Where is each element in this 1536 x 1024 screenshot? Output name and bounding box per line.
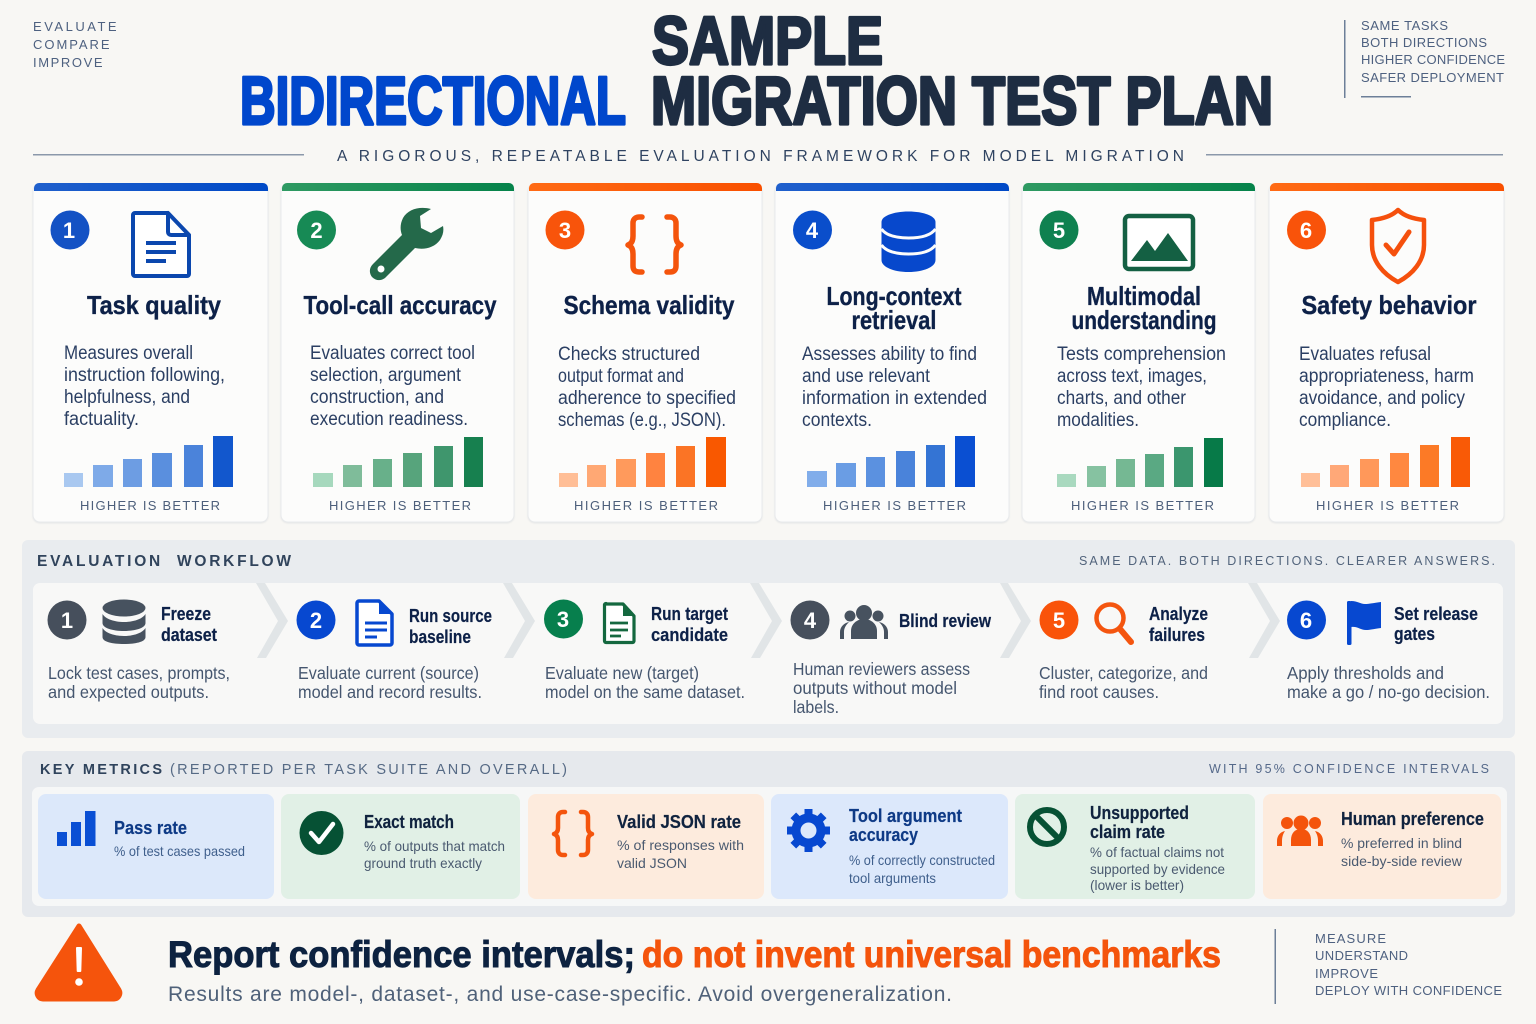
chevrons — [256, 583, 1280, 658]
step 2: model and record results. — [298, 682, 482, 702]
description: construction, and — [310, 387, 444, 408]
step 1 — [48, 600, 230, 702]
metric: exact match — [281, 794, 520, 899]
step 5: failures — [1149, 625, 1205, 645]
description: compliance. — [1299, 410, 1391, 431]
metric: exact match: % of outputs that match — [364, 838, 505, 854]
right tagline — [1344, 18, 1505, 98]
description: Evaluates refusal — [1299, 344, 1431, 365]
badge 5: 5 — [1053, 218, 1065, 243]
step 4: labels. — [793, 697, 839, 717]
step 2 — [296, 600, 492, 702]
left tagline — [33, 19, 119, 70]
panel: card 5 multimodal understanding — [1022, 183, 1255, 522]
metric: exact match: Exact match — [364, 812, 454, 832]
icon: database — [882, 212, 936, 272]
callout subtext: Results are model-, dataset-, and use-case-specific. Avoid overgeneralization. — [168, 983, 952, 1006]
bar chart — [1057, 438, 1223, 487]
step 1: Freeze — [161, 604, 211, 624]
step 3: Evaluate new (target) — [545, 663, 699, 683]
panel: card 6 safety behavior — [1269, 183, 1504, 522]
description: Measures overall — [64, 343, 193, 364]
step 1: dataset — [161, 625, 217, 645]
step 2: baseline — [409, 627, 471, 647]
heading — [1072, 281, 1216, 335]
description: adherence to specified — [558, 388, 736, 409]
metric: pass rate: Pass rate — [114, 818, 187, 838]
step 5: Analyze — [1149, 604, 1208, 624]
metric: valid json rate: valid JSON — [617, 855, 687, 871]
title — [240, 3, 1273, 139]
step 4: 4 — [804, 608, 817, 633]
left tagline: IMPROVE — [33, 55, 105, 70]
icon: people — [840, 605, 888, 639]
icon: braces — [628, 217, 681, 272]
metric: human preference — [1263, 794, 1501, 899]
callout headline — [168, 934, 1221, 975]
step 3: Run target — [651, 604, 728, 624]
panel: evaluation workflow — [22, 540, 1515, 738]
description: schemas (e.g., JSON). — [558, 410, 726, 431]
heading: Safety behavior — [1302, 290, 1476, 320]
right tagline: BOTH DIRECTIONS — [1361, 35, 1487, 50]
badge 2 — [297, 210, 336, 250]
metric: exact match: ground truth exactly — [364, 855, 482, 871]
title: MIGRATION TEST PLAN — [651, 63, 1273, 139]
step 6 — [1287, 600, 1490, 702]
step 6: Set release — [1394, 604, 1478, 624]
step 4: Human reviewers assess — [793, 659, 970, 679]
step 2: Run source — [409, 606, 492, 626]
step 5: find root causes. — [1039, 682, 1159, 702]
icon: warning triangle — [37, 926, 120, 999]
heading: Tool-call accuracy — [304, 290, 497, 320]
step 1: 1 — [61, 608, 73, 633]
icon: document — [133, 213, 189, 276]
description: helpfulness, and — [64, 387, 190, 408]
badge 4: 4 — [806, 218, 819, 243]
metric: human preference: side-by-side review — [1341, 853, 1463, 869]
step 2: Evaluate current (source) — [298, 663, 479, 683]
step 5: Cluster, categorize, and — [1039, 663, 1208, 683]
icon: database — [102, 600, 146, 644]
caption: HIGHER IS BETTER — [80, 498, 220, 513]
heading: Long-context — [826, 281, 962, 311]
panel: card 3 schema validity — [528, 183, 762, 522]
icon: check — [300, 811, 344, 855]
badge 4 — [793, 210, 832, 250]
step 2: 2 — [310, 608, 322, 633]
right closing list: DEPLOY WITH CONFIDENCE — [1315, 983, 1502, 998]
description — [310, 343, 475, 430]
right closing list — [1274, 929, 1502, 1004]
callout headline: Report confidence intervals; — [168, 934, 635, 975]
bar chart — [807, 436, 975, 487]
badge 1: 1 — [63, 218, 75, 243]
badge 1 — [50, 210, 90, 250]
right closing list: MEASURE — [1315, 931, 1386, 946]
step 3: 3 — [557, 607, 569, 632]
metric: valid json rate — [528, 794, 764, 899]
metric: tool argument accuracy: Tool argument — [849, 806, 962, 826]
step 6: Apply thresholds and — [1287, 663, 1444, 683]
panel: card 2 tool-call accuracy — [281, 183, 514, 522]
icon: bars — [57, 811, 96, 846]
metric: tool argument accuracy: % of correctly constructed — [849, 852, 995, 868]
step 4: Blind review — [899, 611, 992, 631]
step 1: and expected outputs. — [48, 682, 209, 702]
description: factuality. — [64, 409, 139, 430]
caption: HIGHER IS BETTER — [1071, 498, 1214, 513]
description — [64, 343, 225, 430]
description: Assesses ability to find — [802, 344, 977, 365]
icon: wrench — [370, 208, 443, 280]
description: Tests comprehension — [1057, 344, 1226, 365]
icon: prohibited — [1030, 810, 1064, 844]
metric: unsupported claim rate: claim rate — [1090, 822, 1165, 842]
description: selection, argument — [310, 365, 462, 386]
right tagline: SAME TASKS — [1361, 18, 1448, 33]
badge 6 — [1287, 210, 1326, 250]
description: charts, and other — [1057, 388, 1187, 409]
step 4 — [790, 600, 992, 717]
heading — [826, 281, 962, 335]
icon: magnifier — [1096, 604, 1131, 642]
heading: Multimodal — [1087, 281, 1201, 311]
metric: human preference: % preferred in blind — [1341, 835, 1462, 851]
step 1: Lock test cases, prompts, — [48, 663, 230, 683]
note: WITH 95% CONFIDENCE INTERVALS — [1209, 762, 1489, 776]
metric: tool argument accuracy — [771, 794, 1008, 899]
badge 6: 6 — [1300, 218, 1312, 243]
heading: Schema validity — [564, 290, 735, 320]
metric: unsupported claim rate — [1015, 794, 1255, 899]
description: Evaluates correct tool — [310, 343, 475, 364]
metric: unsupported claim rate: (lower is better) — [1090, 877, 1184, 893]
icon: gear — [787, 809, 830, 852]
icon: document — [604, 604, 634, 642]
metric: unsupported claim rate: % of factual claims not — [1090, 844, 1224, 860]
description: instruction following, — [64, 365, 225, 386]
metric: tool argument accuracy: tool arguments — [849, 870, 936, 886]
badge 3: 3 — [559, 218, 571, 243]
metric: human preference: Human preference — [1341, 809, 1484, 829]
metric: unsupported claim rate: Unsupported — [1090, 803, 1189, 823]
step 3 — [544, 600, 745, 702]
title: SAMPLE — [652, 3, 883, 79]
metric: pass rate — [38, 794, 274, 899]
callout headline: do not invent universal benchmarks — [642, 934, 1221, 975]
left tagline: COMPARE — [33, 37, 112, 52]
bar chart — [559, 437, 726, 487]
title: BIDIRECTIONAL — [240, 63, 626, 139]
description — [1057, 344, 1226, 431]
description: and use relevant — [802, 366, 931, 387]
step 3: model on the same dataset. — [545, 682, 745, 702]
badge 2: 2 — [310, 218, 323, 243]
metric: pass rate: % of test cases passed — [114, 843, 245, 859]
right closing list: UNDERSTAND — [1315, 948, 1408, 963]
left tagline: EVALUATE — [33, 19, 119, 34]
icon: image — [1125, 216, 1193, 269]
caption: HIGHER IS BETTER — [823, 498, 966, 513]
step 6: 6 — [1300, 608, 1312, 633]
bar chart — [1301, 437, 1470, 487]
caption: HIGHER IS BETTER — [1316, 498, 1459, 513]
icon: braces — [554, 812, 592, 855]
icon: shield — [1372, 210, 1424, 282]
bar chart — [313, 437, 483, 487]
badge 5 — [1040, 210, 1078, 250]
step 6: gates — [1394, 624, 1435, 644]
icon: document — [357, 601, 392, 645]
description: modalities. — [1057, 410, 1139, 431]
description: across text, images, — [1057, 366, 1207, 387]
description — [802, 344, 987, 431]
heading: Task quality — [87, 290, 221, 320]
description: Checks structured — [558, 344, 700, 365]
step 3: candidate — [651, 625, 728, 645]
bar chart — [64, 436, 233, 487]
subtitle: A RIGOROUS, REPEATABLE EVALUATION FRAMEWORK FOR MODEL MIGRATION — [337, 148, 1184, 165]
heading: EVALUATION WORKFLOW — [37, 553, 291, 570]
caption: HIGHER IS BETTER — [329, 498, 471, 513]
caption: HIGHER IS BETTER — [574, 498, 718, 513]
right tagline: SAFER DEPLOYMENT — [1361, 70, 1504, 85]
description — [1299, 344, 1474, 431]
panel: key metrics — [22, 751, 1515, 917]
description: output format and — [558, 366, 684, 387]
metric: valid json rate: % of responses with — [617, 837, 744, 853]
icon: people — [1277, 816, 1323, 846]
description: avoidance, and policy — [1299, 388, 1465, 409]
icon: flag — [1347, 601, 1381, 645]
heading: (REPORTED PER TASK SUITE AND OVERALL) — [170, 762, 567, 778]
step 5 — [1039, 600, 1208, 702]
metric: tool argument accuracy: accuracy — [849, 825, 918, 845]
step 4: outputs without model — [793, 678, 957, 698]
panel: card 4 long-context retrieval — [775, 183, 1009, 522]
metric: unsupported claim rate: supported by evidence — [1090, 861, 1225, 877]
panel: card 1 task quality — [33, 183, 268, 522]
step 5: 5 — [1053, 608, 1065, 633]
note: SAME DATA. BOTH DIRECTIONS. CLEARER ANSWERS. — [1079, 554, 1495, 568]
step 6: make a go / no-go decision. — [1287, 682, 1490, 702]
badge 3 — [546, 210, 584, 250]
description — [558, 344, 736, 431]
heading: understanding — [1072, 305, 1216, 335]
description: appropriateness, harm — [1299, 366, 1474, 387]
heading: retrieval — [852, 305, 936, 335]
right tagline: HIGHER CONFIDENCE — [1361, 52, 1505, 67]
description: information in extended — [802, 388, 987, 409]
heading: KEY METRICS — [40, 762, 162, 778]
description: execution readiness. — [310, 409, 468, 430]
metric: valid json rate: Valid JSON rate — [617, 812, 741, 832]
description: contexts. — [802, 410, 872, 431]
right closing list: IMPROVE — [1315, 966, 1378, 981]
